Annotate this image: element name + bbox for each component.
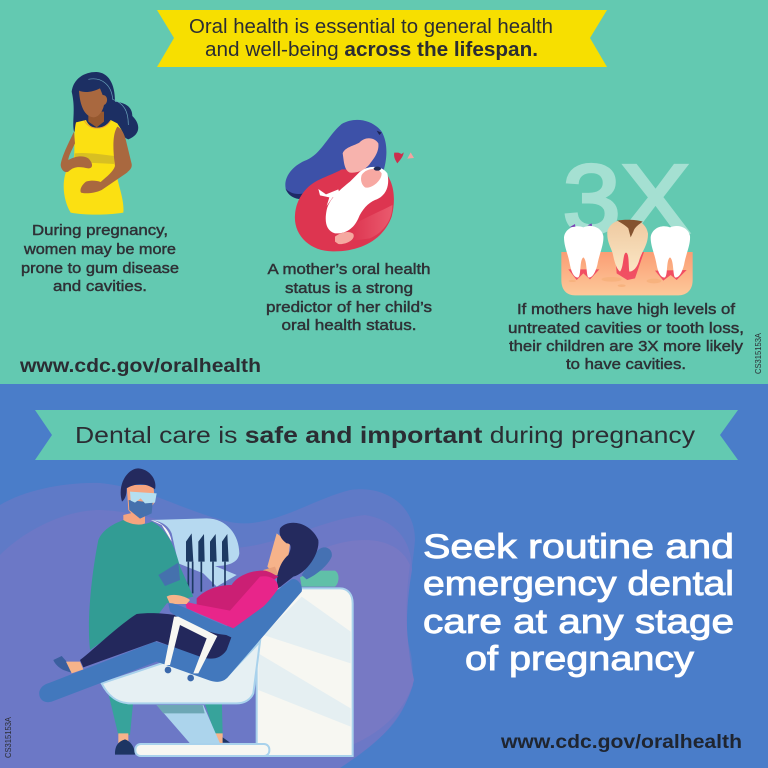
background blobs <box>0 483 415 768</box>
instrument tray <box>151 518 239 593</box>
text: 3X more likely <box>508 301 744 373</box>
dentist <box>89 468 230 755</box>
text: mother's oral health: oral health status. <box>282 317 416 334</box>
code: bottom panel id: CS315153A <box>3 717 13 758</box>
text: 3X more likely: to have cavities. <box>566 356 686 373</box>
callout: seek routine care: of pregnancy <box>465 640 694 678</box>
text: during pregnancy: prone to gum disease <box>21 260 179 277</box>
callout: seek routine care: emergency dental <box>423 565 734 603</box>
large 3X: 3X <box>563 145 690 253</box>
text: during pregnancy <box>21 222 179 295</box>
banner: oral health is essential: Oral health is essential to general health <box>189 16 553 38</box>
code: top panel id: CS315153A <box>753 333 763 374</box>
text: during pregnancy: and cavities. <box>53 278 147 295</box>
icon: 3X teeth with cavities <box>561 145 693 295</box>
panel: dental care during pregnancy <box>0 384 768 768</box>
text: 3X more likely: If mothers have high levels of <box>517 301 736 318</box>
banner: dental care is safe <box>35 410 738 460</box>
url: top panel: www.cdc.gov/oralhealth <box>19 356 261 377</box>
callout: seek routine care <box>423 528 734 678</box>
icon: pregnant woman <box>61 72 138 215</box>
text: mother's oral health: status is a strong <box>285 280 413 297</box>
text: 3X more likely: their children are 3X more likely <box>509 338 744 355</box>
callout: seek routine care: care at any stage <box>423 603 734 641</box>
text: mother's oral health: predictor of her child’s <box>266 299 432 316</box>
banner: dental care is safe: Dental care is safe and important during pregnancy <box>75 422 695 448</box>
text: mother's oral health <box>266 261 432 334</box>
url: bottom panel: www.cdc.gov/oralhealth <box>500 732 742 753</box>
chair and patient <box>39 523 353 756</box>
text: during pregnancy: During pregnancy, <box>32 222 168 239</box>
illustration: dentist with pregnant patient <box>39 468 353 756</box>
text: mother's oral health: A mother’s oral health <box>268 261 430 278</box>
banner: oral health is essential <box>157 10 607 67</box>
icon: mother holding baby <box>285 120 414 251</box>
text: during pregnancy: women may be more <box>23 241 176 258</box>
text: 3X more likely: untreated cavities or tooth loss, <box>508 320 744 337</box>
panel: oral health across the lifespan <box>0 0 768 384</box>
banner: oral health is essential: and well-being across the lifespan. <box>205 39 538 61</box>
callout: seek routine care: Seek routine and <box>423 528 734 566</box>
